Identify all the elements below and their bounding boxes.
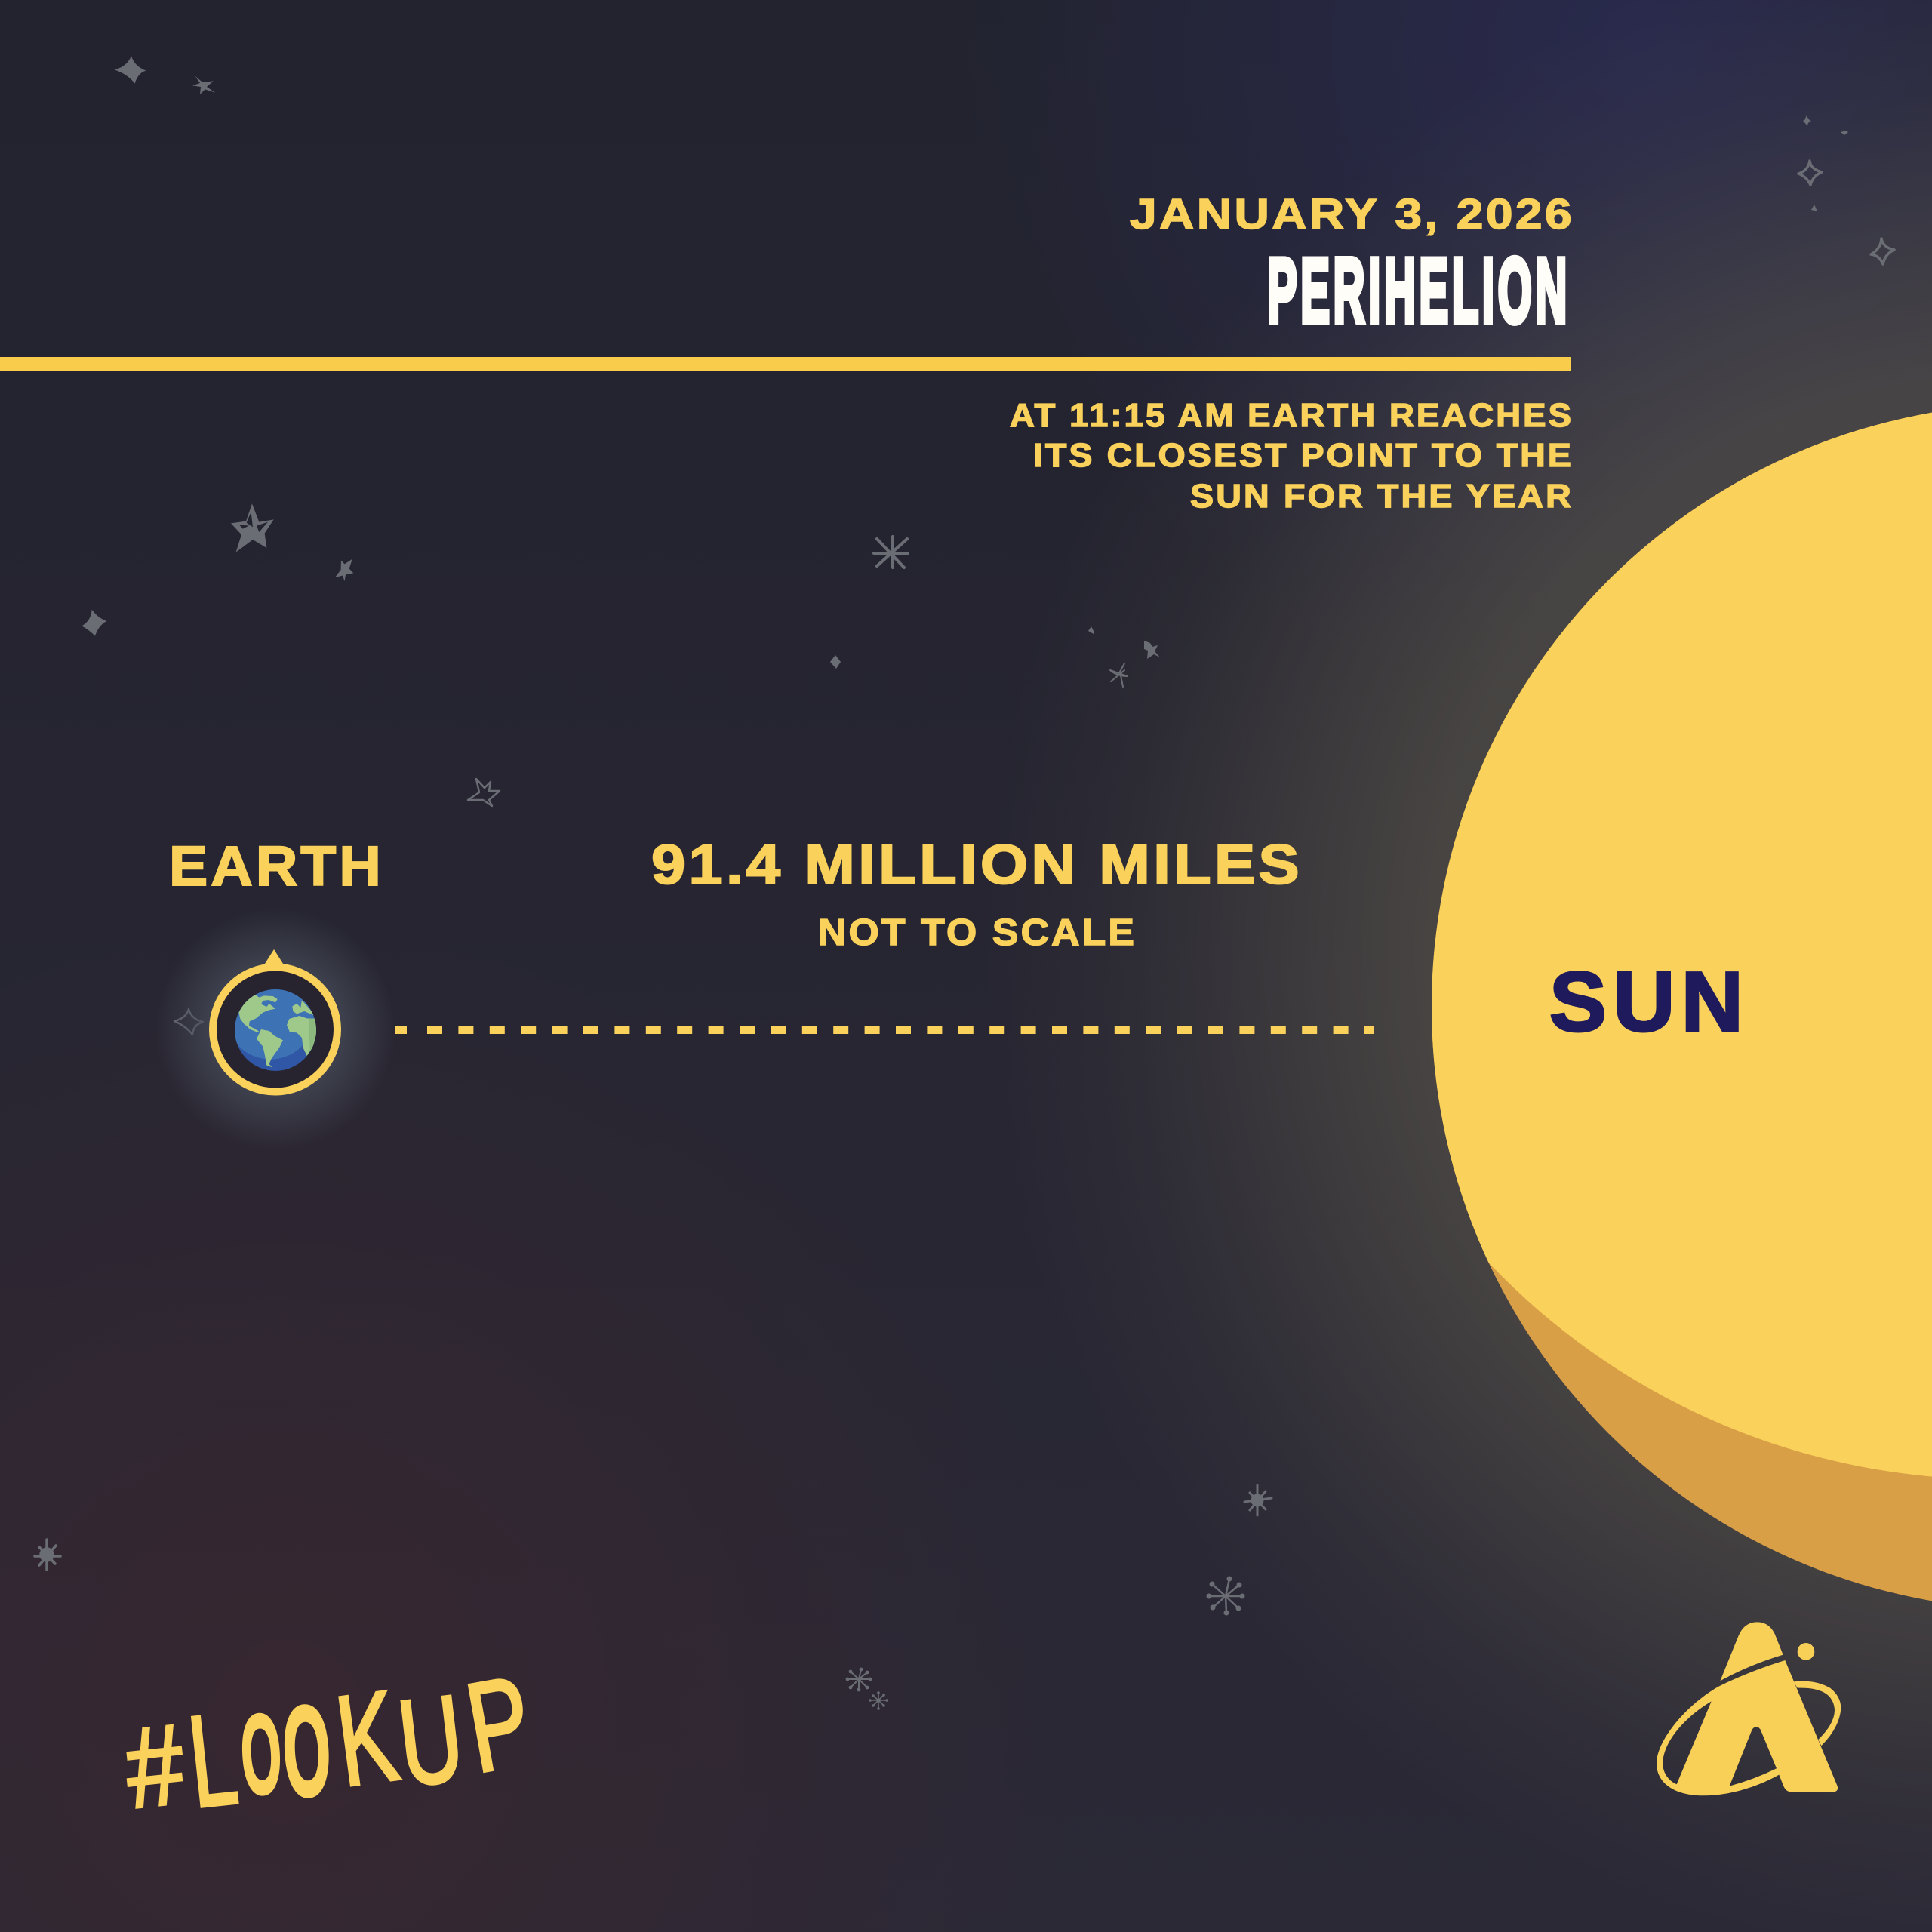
star: four-point left bbox=[82, 610, 106, 636]
logo A body and orbit bbox=[1657, 1660, 1838, 1795]
star: diamond bbox=[830, 655, 841, 669]
date: JANUARY 3, 2026 bbox=[1130, 190, 1574, 238]
star: small filled center bbox=[1144, 641, 1160, 659]
star: four-point outline near Earth bbox=[174, 1009, 203, 1035]
star: four-point outline top right 1 bbox=[1798, 161, 1822, 185]
star: tiny top right 1 bbox=[1803, 115, 1811, 126]
star: dotted asterisk bottom center bbox=[848, 1669, 870, 1690]
description line 1: AT 11:15 AM EARTH REACHES bbox=[1010, 397, 1574, 434]
description line 3: SUN FOR THE YEAR bbox=[1190, 478, 1574, 515]
scale note: NOT TO SCALE bbox=[818, 912, 1137, 953]
star: burst lower right bbox=[1244, 1485, 1272, 1515]
logo A top bbox=[1720, 1622, 1783, 1681]
hashtag: L bbox=[183, 1687, 244, 1836]
hashtag: O bbox=[238, 1690, 285, 1820]
dots on asterisks bbox=[846, 1576, 1245, 1710]
star outlines and asterisks bbox=[174, 161, 1894, 1709]
star: asterisk center bbox=[874, 537, 908, 568]
marker pointer bbox=[263, 949, 285, 966]
star: small dotted asterisk bottom center bbox=[870, 1693, 887, 1709]
hashtag: O bbox=[279, 1679, 334, 1825]
hashtag: K bbox=[329, 1664, 405, 1814]
star bursts and dots bbox=[35, 1485, 1272, 1710]
star: tiny top right 2 bbox=[1841, 131, 1848, 135]
divider bar bbox=[0, 357, 1571, 371]
earth glow bbox=[155, 909, 396, 1150]
hashtag bbox=[113, 1672, 528, 1815]
sun lit face bbox=[1432, 412, 1932, 1476]
earth globe bbox=[235, 989, 316, 1071]
starfield bbox=[82, 56, 1848, 669]
star: thin scribble bbox=[1110, 663, 1128, 687]
logo bbox=[1657, 1622, 1841, 1795]
star: four-point top left bbox=[115, 56, 146, 84]
marker ring bbox=[213, 968, 337, 1091]
star: large sketched bbox=[231, 503, 274, 552]
description line 2: ITS CLOSEST POINT TO THE bbox=[1033, 437, 1574, 474]
hashtag: U bbox=[392, 1670, 469, 1813]
logo orbit right arc bbox=[1794, 1681, 1841, 1746]
star: tiny center bbox=[1088, 626, 1094, 634]
star: dotted asterisk lower right bbox=[1209, 1579, 1242, 1613]
description bbox=[1010, 397, 1574, 515]
sun bbox=[1432, 412, 1932, 1601]
sun shadow crescent bbox=[1419, 392, 1932, 1630]
star: outline middle left bbox=[468, 779, 500, 806]
hashtag: P bbox=[457, 1650, 541, 1800]
sun label: SUN bbox=[1549, 955, 1749, 1049]
earth label: EARTH bbox=[169, 835, 384, 897]
hashtag: # bbox=[120, 1701, 189, 1833]
infographic canvas: PERIHELION bbox=[1268, 239, 1571, 342]
star: small left bbox=[335, 559, 353, 581]
earth marker bbox=[213, 949, 337, 1091]
star: tiny top right 3 bbox=[1811, 205, 1817, 211]
distance label: 91.4 MILLION MILES bbox=[651, 833, 1303, 896]
logo dot bbox=[1798, 1643, 1814, 1660]
star: small top left bbox=[192, 76, 215, 94]
distance dashed line bbox=[395, 1026, 1374, 1034]
star: burst left edge bbox=[35, 1540, 60, 1570]
star: four-point outline top right 2 bbox=[1871, 238, 1894, 264]
